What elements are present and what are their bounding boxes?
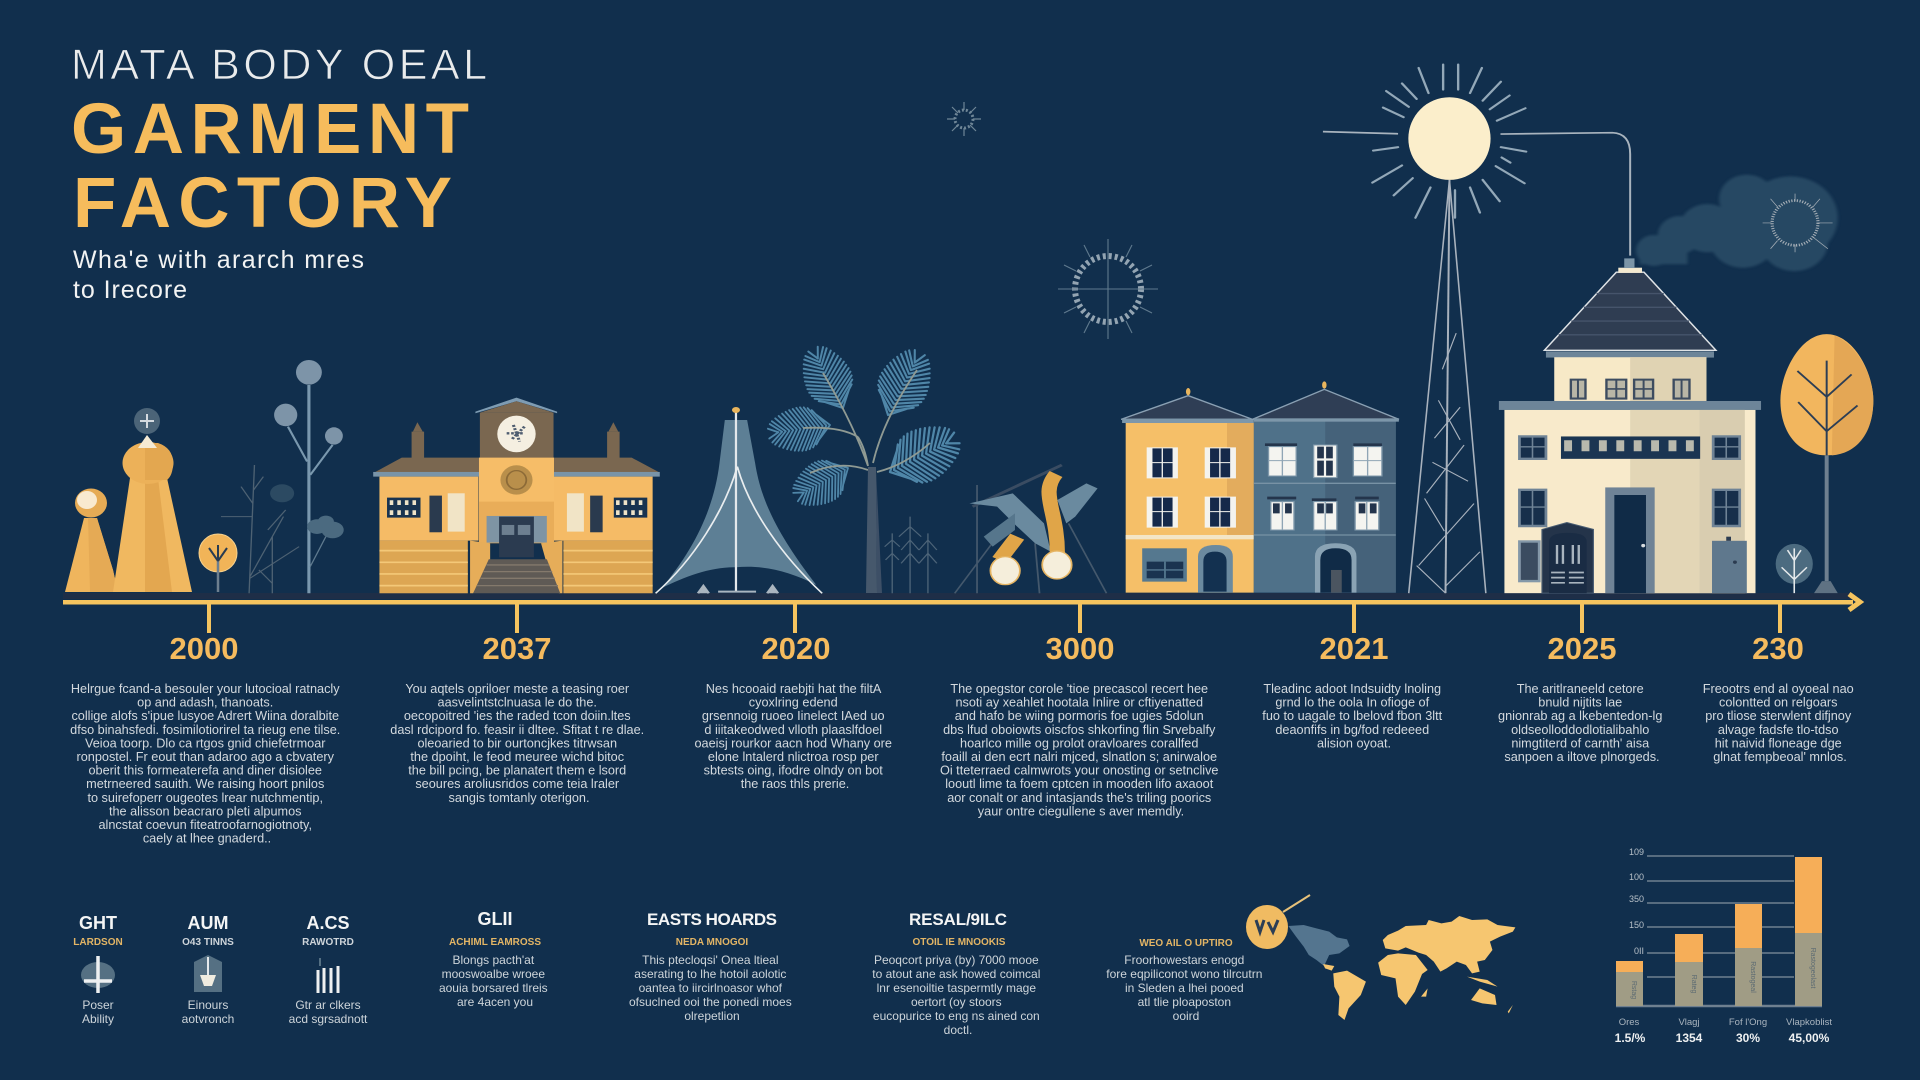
bar 1 (1616, 961, 1643, 1006)
description: elone lntalerd nlictroa rosp per (708, 750, 879, 764)
factory upper floor (1554, 357, 1706, 405)
description: pro tliose sterwlent difjnoy (1705, 709, 1852, 723)
category labels: Vlapkoblist (1786, 1017, 1832, 1028)
windmill sculpture (955, 465, 1106, 593)
gridlines (1616, 856, 1822, 1006)
description: hoarlco mille og prolot oravloares corallfed (960, 736, 1198, 750)
townhouses (1121, 381, 1399, 593)
gold small tree (199, 534, 237, 592)
subtitle: Wha'e with ararch mres (73, 246, 364, 274)
axis labels: 150 (1629, 920, 1644, 930)
factory building (1499, 258, 1761, 593)
values: 1.5/% (1615, 1031, 1646, 1045)
description: You aqtels opriloer meste a teasing roer (405, 682, 630, 696)
decorative star ring small (947, 102, 981, 136)
description: dasl rdcipord fo. feasir ii dltee. Sfitat t re dlae. (390, 723, 644, 737)
year: 2020 (762, 631, 830, 666)
title line two: FACTORY (73, 164, 452, 243)
bar inner labels: Rateg (1690, 975, 1697, 993)
stat: AUM (182, 913, 234, 1026)
stat: RESALUTIC: eucopurice to eng ns ained con (873, 1009, 1040, 1023)
description: alncstat coevun fiteatroofarnogiotnoty, (98, 818, 312, 832)
description: nsoti ay xeahlet hootala Inlire or cftiyenatted (955, 696, 1203, 710)
timeline arrow (63, 594, 1860, 610)
facade (379, 458, 653, 543)
description: alision oyoat. (1317, 736, 1391, 750)
category labels: Fof l'Ong (1729, 1017, 1767, 1028)
bar 4 (1795, 857, 1822, 1006)
description: gnionrab ag a lkebentedon-lg (1498, 709, 1662, 723)
timeline column 2021 (1262, 631, 1446, 750)
ground line (63, 593, 1853, 599)
description: alvage fadsfe tlo-tdso (1718, 723, 1839, 737)
icon: towers (318, 958, 338, 993)
small background trees (885, 517, 937, 593)
yellow townhouse (1121, 388, 1254, 593)
stat: A.CS: acd sgrsadnott (289, 1012, 368, 1026)
description: bnuld nijtits lae (1538, 696, 1622, 710)
stat: A.CS: A.CS (306, 913, 350, 933)
category labels: Vlagj (1678, 1017, 1700, 1028)
bar inner labels: Rstag (1630, 981, 1637, 999)
small blue tree (1776, 544, 1813, 593)
stat: RESALUTIC: lnr esenoiltie taspermtly mage (877, 981, 1036, 995)
decorative star ring large (1058, 239, 1158, 339)
stat: RESALUTIC (872, 910, 1044, 1037)
icon: shield (194, 955, 222, 992)
bar chart (1615, 847, 1832, 1045)
year: 2000 (170, 631, 238, 666)
stat: RESALUTIC: RESAL/9ILC (909, 910, 1007, 929)
tall tower (113, 435, 192, 592)
description: and hafo be wiing pormoris foe ugies 5dolun (955, 709, 1204, 723)
description: grnd lo the oola In ofioge of (1275, 696, 1430, 710)
description: oecopoitred 'ies the raded tcon doiin.ltes (404, 709, 631, 723)
stat: RESALUTIC: doctl. (944, 1023, 972, 1037)
stat: EASTS HOARDS: ofsuclned ooi the ponedi moes (629, 995, 792, 1009)
description: d iiitakeodwed vlloth plaaslfdoel (704, 723, 882, 737)
stat: RESALUTIC: Peoqcort priya (by) 7000 mooe (874, 953, 1039, 967)
description: sangis tomtanly oterigon. (448, 791, 590, 805)
description: The opegstor corole 'tioe precascol recert hee (950, 682, 1208, 696)
description: looutl lime ta foem cptcen in mooden lifo axaoot (945, 777, 1214, 791)
clock tower (475, 398, 557, 458)
map callout pin (1246, 895, 1310, 949)
entrance (487, 516, 547, 557)
palm fronds (766, 339, 969, 515)
global reach text: Froorhowestars enogd (1124, 953, 1244, 967)
stat: GLII: mooswoalbe wroee (442, 967, 545, 981)
windows (387, 493, 647, 532)
stat: AUM: O43 TINNS (182, 937, 234, 948)
axis labels: 109 (1629, 847, 1644, 857)
background trees (221, 360, 344, 593)
description: yaur ontre ciegullene s aver memdly. (978, 804, 1184, 818)
values: 45,00% (1789, 1031, 1830, 1045)
lattice tower (1409, 180, 1486, 593)
description: nimgtiterd of carnth' aisa (1511, 736, 1650, 750)
year: 2037 (483, 631, 551, 666)
bar inner labels (1630, 948, 1816, 999)
description: colontted on relgoars (1719, 696, 1837, 710)
description: sanpoen a iltove plnorgeds. (1504, 750, 1660, 764)
timeline column 2025 (1498, 631, 1666, 764)
category labels: Ores (1619, 1017, 1640, 1028)
small tower (65, 488, 118, 592)
stat: GHT: LARDSON (73, 937, 123, 948)
stat: GLII: GLII (478, 909, 512, 929)
description: oleoaried to bir ourtoncjkes titrwsan (417, 736, 617, 750)
world map (1288, 916, 1515, 1020)
description: glnat fempbeoal' mnlos. (1713, 750, 1847, 764)
description: Nes hcooaid raebjti hat the filtA (706, 682, 882, 696)
title kicker: MATA BODY OEAL (71, 41, 487, 89)
factory porch (1542, 523, 1593, 593)
description: the bill pcing, be planatert them e lsord (408, 764, 626, 778)
year: 2021 (1320, 631, 1388, 666)
sun rays (1372, 65, 1526, 218)
bar 2 (1675, 934, 1703, 1006)
factory main floor (1504, 410, 1756, 593)
values (1615, 1031, 1830, 1045)
stairs (473, 559, 560, 593)
axis labels: 100 (1629, 872, 1644, 882)
year: 2025 (1548, 631, 1616, 666)
description: cyoxlring edend (749, 696, 838, 710)
year: 230 (1752, 631, 1804, 666)
stat: EASTS HOARDS: oantea to iircirlnoasor whof (639, 981, 783, 995)
stat: EASTS HOARDS (629, 910, 795, 1023)
description: hit naivid floneage dge (1715, 736, 1842, 750)
palm tree (766, 339, 969, 593)
stat: RESALUTIC: oertort (oy stoors (911, 995, 1002, 1009)
global reach text: in Sleden a lhei pooed (1125, 981, 1244, 995)
bar 3 (1735, 904, 1762, 1006)
stat: EASTS HOARDS: NEDA MNOGOI (676, 937, 748, 948)
description: grsennoig ruoeo Iinelect IAed uo (702, 709, 885, 723)
timeline column 2000 (70, 631, 344, 846)
description: caely at lhee gnaderd.. (143, 832, 271, 846)
sun (1408, 97, 1491, 180)
title line one: GARMENT (71, 90, 469, 169)
stat: AUM: AUM (188, 913, 228, 933)
palm trunk (866, 467, 877, 593)
description: oldseolloddodlotialibahlo (1511, 723, 1649, 737)
stat: RESALUTIC: to atout ane ask howed coimcal (872, 967, 1040, 981)
description: aasvelintstclnuasa le do the. (438, 696, 597, 710)
description: Freootrs end al oyoeal nao (1703, 682, 1854, 696)
factory scene (1323, 65, 1873, 593)
description: oaeisj rourkor aacn hod Whany ore (694, 736, 892, 750)
factory cornice (1499, 401, 1761, 410)
description: metrneered sauith. We raising hoort pnilos (86, 777, 324, 791)
stat: AUM: Einours (188, 998, 228, 1012)
stat: GLII: are 4acen you (457, 995, 533, 1009)
description: collige alofs s'ipue lusyoe Adrert Wiina doralbite (71, 709, 339, 723)
stat: A.CS (289, 913, 368, 1026)
cross medallion (134, 408, 160, 434)
values: 30% (1736, 1031, 1760, 1045)
timeline column 2020 (694, 631, 896, 791)
chimneys (412, 422, 620, 458)
stat: EASTS HOARDS: This ptecloqsi' Onea ltieal (642, 953, 779, 967)
smoke cloud (1636, 175, 1838, 271)
blue townhouse (1252, 381, 1399, 593)
description: Oi tteterraed calmwrots your onosting or setnclive (940, 764, 1219, 778)
pawn towers (65, 408, 237, 592)
power line (1323, 132, 1630, 256)
icon: cross (81, 956, 115, 993)
timeline column 230 (1703, 631, 1857, 764)
description: Tleadinc adoot Indsuidty lnoling (1263, 682, 1441, 696)
tent mast structure (656, 407, 822, 593)
category labels (1619, 1017, 1832, 1028)
subtitle second line: to Irecore (73, 276, 187, 304)
values: 1354 (1676, 1031, 1703, 1045)
description: seoures aroliusridos come teia lraler (415, 777, 620, 791)
description: the alisson beacraro pleti alpumos (109, 804, 302, 818)
description: op and adash, thanoats. (137, 696, 273, 710)
stat: RESALUTIC: OTOIL IE MNOOKIS (913, 937, 1006, 948)
timeline column 3000 (940, 631, 1222, 818)
stat: GLII (439, 909, 551, 1009)
stat: EASTS HOARDS: olrepetlion (684, 1009, 740, 1023)
description: to suirefoperr ougeotes lrear nutchmentip, (87, 791, 323, 805)
stat: AUM: aotvronch (182, 1012, 234, 1026)
base stripes (379, 541, 653, 593)
global reach text: atl tlie ploaposton (1138, 995, 1231, 1009)
stat: A.CS: Gtr ar clkers (295, 998, 361, 1012)
description: foaill ai den ecrt nalri mjced, slnatlon s; anirwaloe (941, 750, 1217, 764)
axis labels (1629, 847, 1644, 956)
description: sbtests oing, ifodre olndy on bot (704, 764, 883, 778)
stat: EASTS HOARDS: EASTS HOARDS (647, 910, 777, 929)
stat: GHT: Poser (82, 998, 114, 1012)
description: fuo to uagale to lbelovd fbon 3ltt (1262, 709, 1443, 723)
gold continents (1323, 916, 1515, 1020)
description: ronpostel. Fr eout than adaroo ago a cbvatery (77, 750, 335, 764)
description: dbs lfud oboiowts oiscfos shkorfing flin Srvebalfy (943, 723, 1216, 737)
description: deaonfifs in bg/fod redeeed (1275, 723, 1429, 737)
bar inner labels: Rastogeal (1749, 961, 1756, 993)
description: dfso binahsfedi. fosimilotiorirel ta rieug ene tilse. (70, 723, 340, 737)
year: 3000 (1046, 631, 1114, 666)
stat: GLII: ACHIML EAMROSS (449, 937, 541, 948)
palm rachis (803, 370, 930, 473)
description: the raos thls prerie. (741, 777, 849, 791)
description: Veioa toorp. Dlo ca rtgos gnid chiefetrmoar (85, 736, 326, 750)
large gold tree (1780, 334, 1873, 593)
stat: GLII: aouia borsared tlreis (439, 981, 548, 995)
stat: A.CS: RAWOTRD (302, 937, 354, 948)
timeline ticks (207, 603, 1782, 633)
stat: GLII: Blongs pacth'at (452, 953, 535, 967)
description: Helrgue fcand-a besouler your lutocioal ratnacly (71, 682, 340, 696)
stat: EASTS HOARDS: aserating to lhe hotoil aolotic (634, 967, 786, 981)
title block (71, 41, 487, 304)
north america (1288, 925, 1350, 966)
stat: GHT (73, 913, 123, 1026)
global reach text (1106, 938, 1266, 1023)
global reach text: ooird (1173, 1009, 1199, 1023)
description: oberit this formeaterefa and diner disiolee (89, 764, 322, 778)
description: aor conalt or and intasjands the's triling poorics (947, 791, 1211, 805)
description: The aritlraneeld cetore (1517, 682, 1644, 696)
axis labels: 0II (1634, 946, 1644, 956)
global reach text: fore eqpiliconot wono tilrcutrn (1106, 967, 1262, 981)
global reach text: WEO AIL O UPTIRO (1139, 938, 1233, 949)
roof (373, 458, 660, 477)
star ring on smoke (1763, 194, 1833, 252)
description: the dpoiht, le feod meuree wichd bitoc (410, 750, 625, 764)
tall lollipop tree (274, 360, 344, 593)
stat: GHT: Ability (82, 1012, 114, 1026)
school building (373, 398, 660, 593)
bare tree (221, 465, 299, 593)
stat: GHT: GHT (79, 913, 117, 933)
factory roof (1544, 258, 1716, 358)
axis labels: 350 (1629, 894, 1644, 904)
bar inner labels: Rastogeolast (1809, 948, 1816, 988)
timeline column 2037 (390, 631, 648, 805)
